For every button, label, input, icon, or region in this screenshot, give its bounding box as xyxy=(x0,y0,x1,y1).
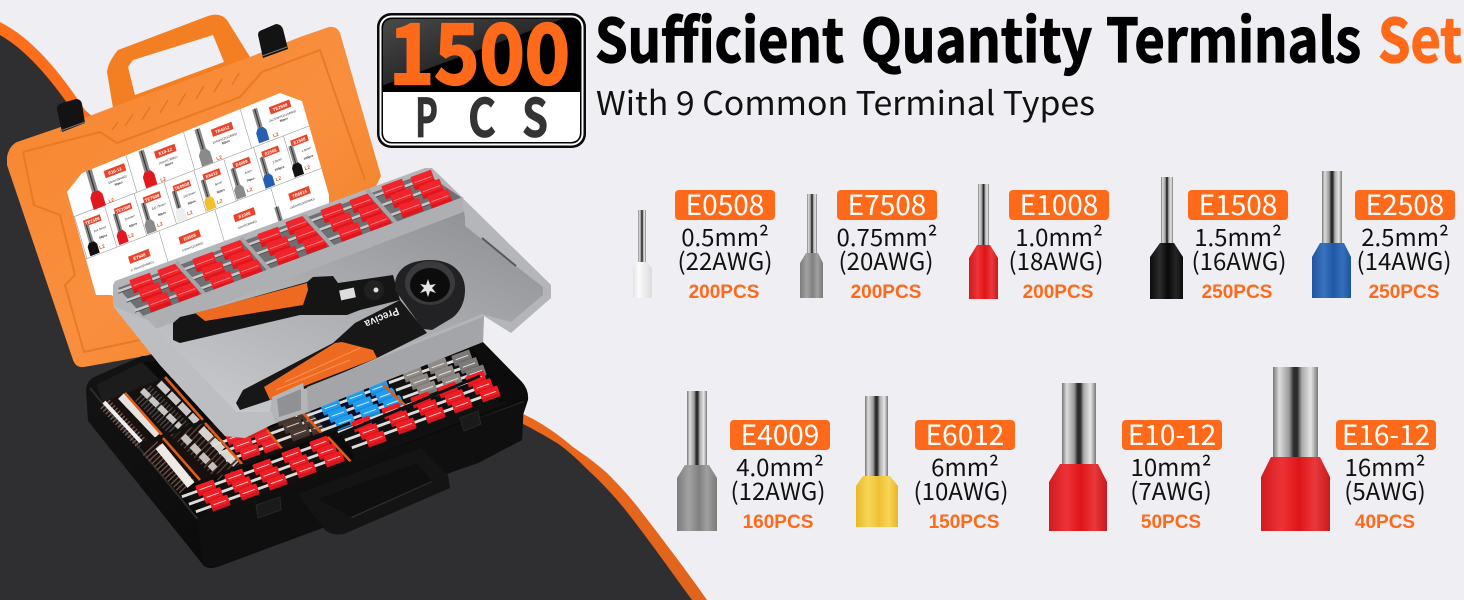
label cell TE2508: 2x2.5mm²(2x14AWG) xyxy=(269,109,297,123)
label row two: E1508 xyxy=(293,136,307,146)
model badge: E2508 xyxy=(1366,184,1444,224)
terminal card: E0508 xyxy=(633,184,775,303)
size spec xyxy=(731,448,825,507)
label cell TE2508: TE2508 xyxy=(272,102,288,112)
compartment: dark ferrules xyxy=(260,403,331,450)
lid handle xyxy=(107,15,250,118)
label row two: L2 xyxy=(275,175,282,183)
label row two: L2 xyxy=(186,210,194,218)
size spec: (20AWG) xyxy=(839,242,933,277)
size spec xyxy=(1130,448,1212,507)
size spec: 1.0mm² xyxy=(1015,218,1103,253)
case base xyxy=(86,341,528,568)
label row two: 2x0.75mm² xyxy=(151,202,166,211)
model badge: E16-12 xyxy=(1342,414,1430,454)
latch left xyxy=(57,99,85,132)
label row two: 50pcs xyxy=(216,187,226,194)
size spec: (18AWG) xyxy=(1009,242,1103,277)
badge: 1500 PCS xyxy=(377,0,586,153)
label row two: L2 xyxy=(99,243,106,251)
title xyxy=(595,0,1462,80)
model badge: E4009 xyxy=(741,414,819,454)
label row two: 2.5mm² xyxy=(272,157,283,164)
label row two: 100pcs xyxy=(303,153,314,161)
lower handle xyxy=(236,300,427,410)
label cell TE2508: 50pcs xyxy=(279,116,289,123)
label row two: L2 xyxy=(304,164,311,172)
background: orange arc band xyxy=(0,22,707,600)
label cell TE4012: L2 xyxy=(216,154,223,162)
label row two: TE1508 xyxy=(84,215,101,226)
lid ribs xyxy=(112,73,239,130)
crimping tool xyxy=(173,260,465,410)
label row two: 50pcs xyxy=(129,221,138,228)
compartment: grey ferrules xyxy=(387,349,487,404)
die star xyxy=(420,279,436,297)
black dividers xyxy=(140,376,506,482)
size spec xyxy=(678,218,772,277)
size spec xyxy=(1192,218,1286,277)
die opening xyxy=(405,261,455,305)
size spec xyxy=(914,448,1008,507)
label cell TE4012: 50pcs xyxy=(221,138,231,145)
size spec: 10mm² xyxy=(1131,448,1211,483)
label row two: 70pcs xyxy=(246,176,255,183)
orange dividers xyxy=(125,377,406,480)
label cell TE4012: TE4012 xyxy=(214,124,231,135)
size spec: (7AWG) xyxy=(1130,472,1212,507)
tray terminal strip xyxy=(118,173,462,318)
label row two: E6012 xyxy=(205,170,219,179)
label row two: 2x1mm² xyxy=(124,214,135,221)
quantity: 250PCS xyxy=(1369,282,1439,303)
case carry handle xyxy=(298,448,450,534)
strip red ferrules xyxy=(115,170,453,317)
size spec: (10AWG) xyxy=(914,472,1008,507)
tray shell xyxy=(113,168,551,438)
label row two: 50pcs xyxy=(99,233,108,240)
badge unit: S xyxy=(522,77,548,153)
label row two: L2 xyxy=(128,232,135,240)
label cell E16-12: E16-12 xyxy=(108,166,123,176)
size spec: 1.5mm² xyxy=(1194,218,1282,253)
badge white panel xyxy=(383,92,580,142)
size spec: (14AWG) xyxy=(1357,242,1451,277)
label row two: L2 xyxy=(246,187,253,194)
upper handle xyxy=(173,275,400,343)
size spec xyxy=(1009,218,1103,277)
label cell E16-12: 16mm²(5AWG) xyxy=(108,174,127,185)
badge gloss panel xyxy=(383,19,580,92)
crimper head xyxy=(395,260,465,330)
label row two: TE7508 xyxy=(144,192,160,203)
label cell E10-12: 10mm²(7AWG) xyxy=(158,155,178,166)
compartment: blue ferrules xyxy=(305,379,406,436)
label cell E16-12: L2 xyxy=(108,197,115,205)
label row three xyxy=(128,186,315,272)
compartment: long red front row xyxy=(180,435,352,517)
index label sheet xyxy=(67,93,329,320)
terminal card: E1008 xyxy=(969,184,1109,303)
label row three: 0.75mm²(20AWG) xyxy=(130,260,154,272)
case interior xyxy=(96,344,507,515)
ferrule: yellow xyxy=(856,396,898,527)
terminal card: E10-12 xyxy=(1049,383,1222,533)
label row two: 1.5mm² xyxy=(301,146,311,153)
label cell TE4012: 2x4mm²(2x12AWG) xyxy=(212,132,238,145)
label row two: TE0508 xyxy=(174,181,190,191)
terminal card: E4009 xyxy=(677,391,830,533)
compartments: white and grey ferrules xyxy=(103,377,243,490)
label cell E16-12 xyxy=(86,163,127,210)
size spec: 6mm² xyxy=(931,448,999,483)
quantity: 250PCS xyxy=(1202,282,1272,303)
label row three: 2x6mm²(2x10AWG) xyxy=(290,197,315,210)
tray lower rim xyxy=(113,306,275,438)
white ferrule strips xyxy=(104,383,236,485)
model badge: E0508 xyxy=(686,184,764,224)
label cell E10-12 xyxy=(138,144,178,188)
label row three: TE6014 xyxy=(292,188,308,199)
size spec: (16AWG) xyxy=(1192,242,1286,277)
ferrule: grey large xyxy=(677,391,717,531)
quantity: 50PCS xyxy=(1141,512,1201,533)
adjuster and printed icons xyxy=(339,280,384,300)
label row three: E7508 xyxy=(133,252,147,261)
label row three: E1008 xyxy=(238,210,252,220)
brand name on tool: Preciva xyxy=(362,305,401,330)
model badge: E1508 xyxy=(1199,184,1277,224)
size spec: 0.5mm² xyxy=(681,218,769,253)
model badge: E1008 xyxy=(1020,184,1098,224)
lower handle orange grip xyxy=(264,342,377,400)
tray front wall xyxy=(307,316,484,412)
model badge: E7508 xyxy=(848,184,926,224)
terminal card: E1508 xyxy=(1150,177,1288,303)
label cell E16-12: 50pcs xyxy=(114,180,124,187)
ferrule: red 16mm xyxy=(1261,367,1330,531)
subtitle: With 9 Common Terminal Types xyxy=(596,77,1095,125)
label row two xyxy=(80,134,318,256)
size spec xyxy=(1344,448,1426,507)
size spec xyxy=(1357,218,1451,277)
latch right xyxy=(258,24,288,58)
background: dark shape xyxy=(0,35,692,600)
label row two: 2x0.5mm² xyxy=(183,190,196,199)
ferrule: white xyxy=(633,210,652,298)
label cell TE2508: L2 xyxy=(272,132,280,139)
label row two: 4mm² xyxy=(244,169,252,175)
ferrule: black xyxy=(1150,177,1183,299)
terminal card: E2508 xyxy=(1312,171,1455,303)
label cell E10-12: 50pcs xyxy=(165,160,174,167)
quantity: 200PCS xyxy=(689,282,759,303)
upper handle orange grip xyxy=(195,283,308,321)
grey tool tray xyxy=(113,168,551,438)
size spec: 0.75mm² xyxy=(837,218,937,253)
ferrule: red xyxy=(969,184,998,299)
quantity: 200PCS xyxy=(1023,282,1093,303)
label row two: E4009 xyxy=(235,158,249,168)
case rim highlight xyxy=(90,388,524,522)
label row two: TE1008 xyxy=(115,204,132,214)
tray handle notch xyxy=(272,383,308,423)
lid inner bevel xyxy=(23,50,365,352)
label row two: 50pcs xyxy=(157,210,167,217)
label cell TE4012 xyxy=(194,122,237,167)
size spec: (5AWG) xyxy=(1344,472,1426,507)
terminal card: E16-12 xyxy=(1261,367,1436,533)
index label contents xyxy=(74,100,322,272)
divider wall xyxy=(140,197,466,331)
badge unit: P xyxy=(415,77,438,153)
illustration: open terminal case with crimper xyxy=(7,15,551,568)
label cell TE2508 xyxy=(252,100,296,144)
size spec: 4.0mm² xyxy=(736,448,824,483)
compartment: long red right row xyxy=(336,370,501,461)
size spec xyxy=(837,218,937,277)
ferrule: red 10mm xyxy=(1049,383,1107,531)
label row two: 2x1.5mm² xyxy=(93,225,107,233)
size spec: (12AWG) xyxy=(731,472,825,507)
size spec: 16mm² xyxy=(1345,448,1425,483)
size spec: 2.5mm² xyxy=(1361,218,1449,253)
ferrule: blue xyxy=(1312,171,1351,298)
label row two: L2 xyxy=(157,221,164,229)
strip dividers xyxy=(176,190,396,297)
terminal card: E6012 xyxy=(856,396,1015,533)
quantity: 150PCS xyxy=(929,512,999,533)
case lid xyxy=(7,15,381,367)
ferrule: grey xyxy=(800,194,823,298)
lid shell xyxy=(7,27,381,367)
badge frame xyxy=(377,13,586,148)
quantity: 160PCS xyxy=(743,512,813,533)
compartment: red ferrules partly hidden xyxy=(207,421,283,466)
label row two: 100pcs xyxy=(274,164,285,172)
front clips xyxy=(256,411,481,518)
terminal card: E7508 xyxy=(800,184,937,303)
quantity: 40PCS xyxy=(1355,512,1415,533)
model badge: E10-12 xyxy=(1128,414,1216,454)
badge unit xyxy=(415,77,548,153)
case body xyxy=(86,341,528,568)
quantity: 200PCS xyxy=(851,282,921,303)
label row three: 0.5mm²(22AWG) xyxy=(182,241,204,253)
size spec: (22AWG) xyxy=(678,242,772,277)
tray floor xyxy=(148,201,543,412)
label row two: 6mm² xyxy=(214,180,223,187)
label row two: L2 xyxy=(216,198,224,206)
model badge: E6012 xyxy=(926,414,1004,454)
label row three: 1mm²(18AWG) xyxy=(238,219,257,230)
label cell E10-12: E10-12 xyxy=(158,146,173,156)
label row two: E2508 xyxy=(264,147,278,157)
badge unit: C xyxy=(468,77,496,153)
label cell E10-12: L2 xyxy=(160,176,167,184)
label row two: 50pcs xyxy=(187,199,197,206)
front wall shading xyxy=(197,402,524,566)
label row three: E0508 xyxy=(183,232,197,242)
